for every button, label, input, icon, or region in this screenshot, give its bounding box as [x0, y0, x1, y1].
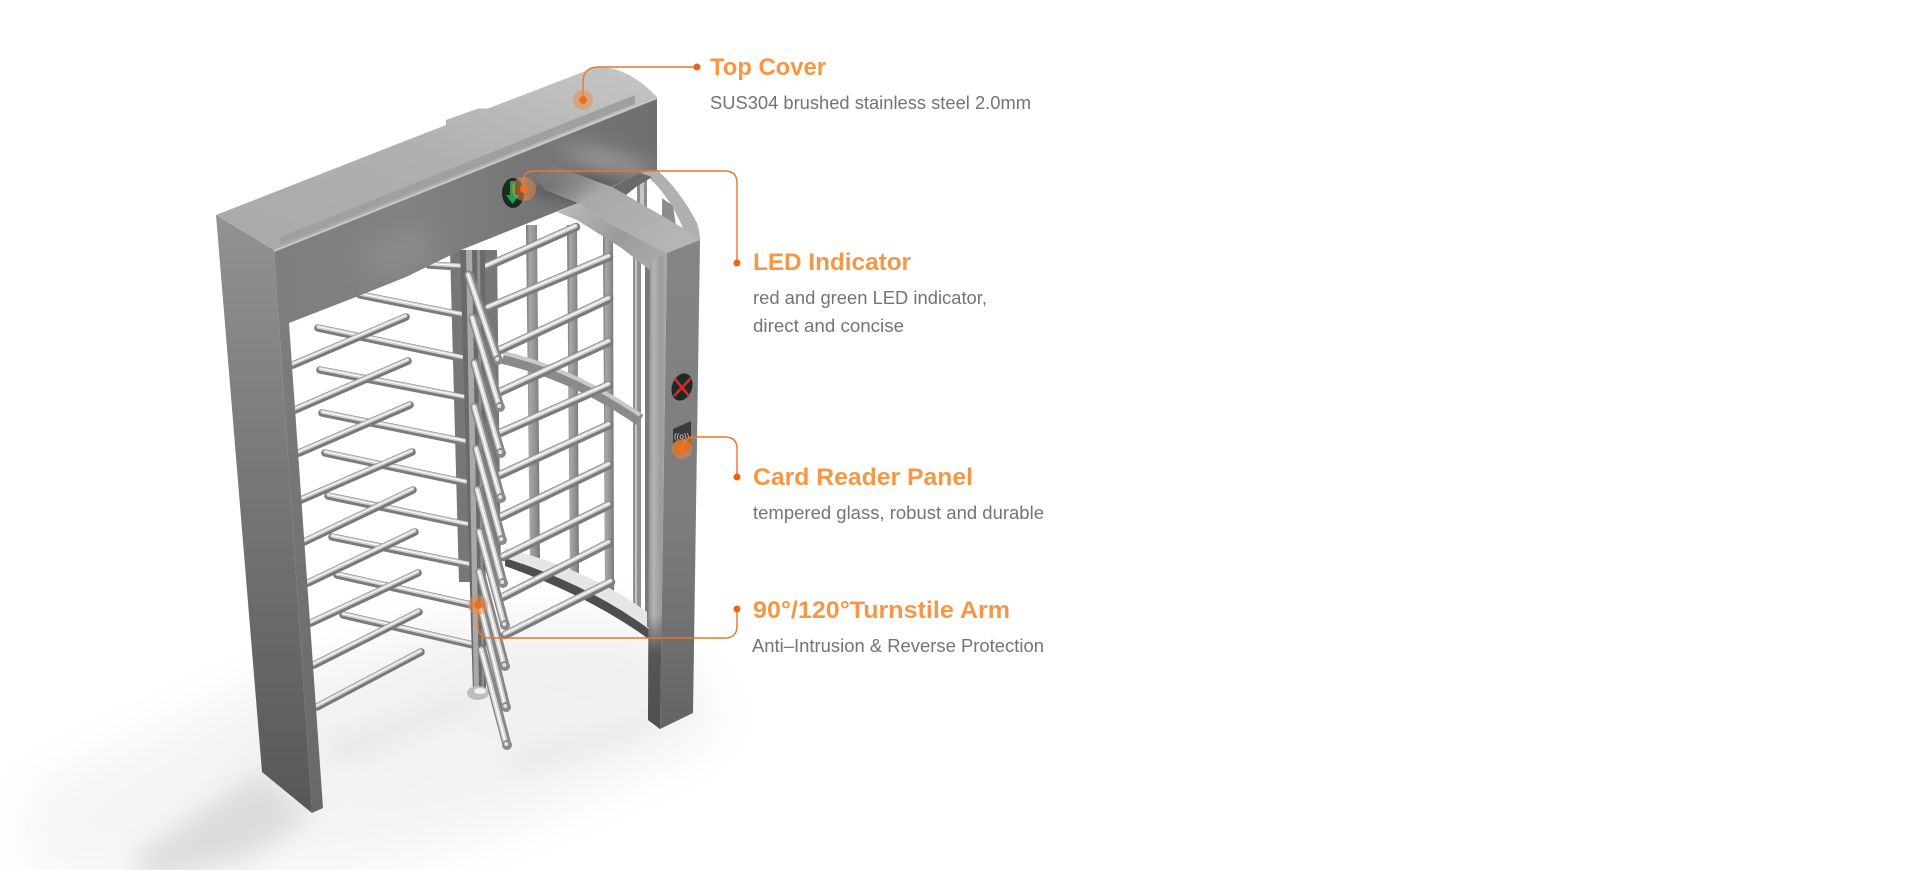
fixed arms right — [486, 226, 611, 635]
marker: LED — [512, 177, 536, 201]
text: top cover: SUS304 brushed stainless steel 2.0mm — [710, 93, 1031, 113]
rear vertical bars — [526, 177, 650, 627]
turnstile — [216, 66, 700, 813]
top beam — [216, 66, 657, 323]
heading: LED: LED Indicator — [753, 249, 911, 276]
text: arm: Anti–Intrusion & Reverse Protection — [752, 636, 1044, 656]
callout: LED indicator — [512, 171, 987, 336]
icon: card reader: ((o)) — [674, 432, 689, 441]
marker: top cover — [573, 90, 593, 110]
leader line: LED — [523, 171, 737, 263]
callout: top cover — [573, 54, 1031, 113]
lower side band — [557, 203, 665, 275]
callout: card reader panel — [672, 437, 1044, 523]
floor shadow — [30, 620, 720, 870]
heading: card reader: Card Reader Panel — [753, 464, 973, 491]
rear post — [450, 250, 501, 582]
heading: arm: 90°/120°Turnstile Arm — [753, 597, 1010, 624]
leader line: top cover — [583, 67, 697, 100]
central post — [460, 250, 489, 700]
text: LED: red and green LED indicator, — [753, 288, 987, 308]
upper ring — [503, 353, 640, 420]
icon: card reader — [673, 421, 691, 457]
leader line: arm — [478, 605, 737, 638]
side arm — [535, 165, 700, 253]
icon: red LED — [668, 370, 696, 404]
text: card reader: tempered glass, robust and durable — [753, 503, 1044, 523]
front arms — [292, 316, 421, 707]
heading: top cover: Top Cover — [710, 54, 826, 81]
icon: green LED — [502, 178, 524, 208]
callout: turnstile arm — [468, 595, 1044, 656]
right pillar — [648, 240, 700, 729]
marker: arm — [468, 595, 488, 615]
text: LED — [753, 288, 987, 336]
curved side frame — [600, 170, 700, 270]
floor ring — [505, 548, 650, 640]
text: LED: direct and concise — [753, 316, 904, 336]
leader line: card reader — [682, 437, 737, 477]
rotating arm — [468, 275, 507, 745]
fixed arms left — [318, 264, 473, 645]
left pillar — [216, 215, 323, 813]
marker: card reader — [672, 439, 692, 459]
